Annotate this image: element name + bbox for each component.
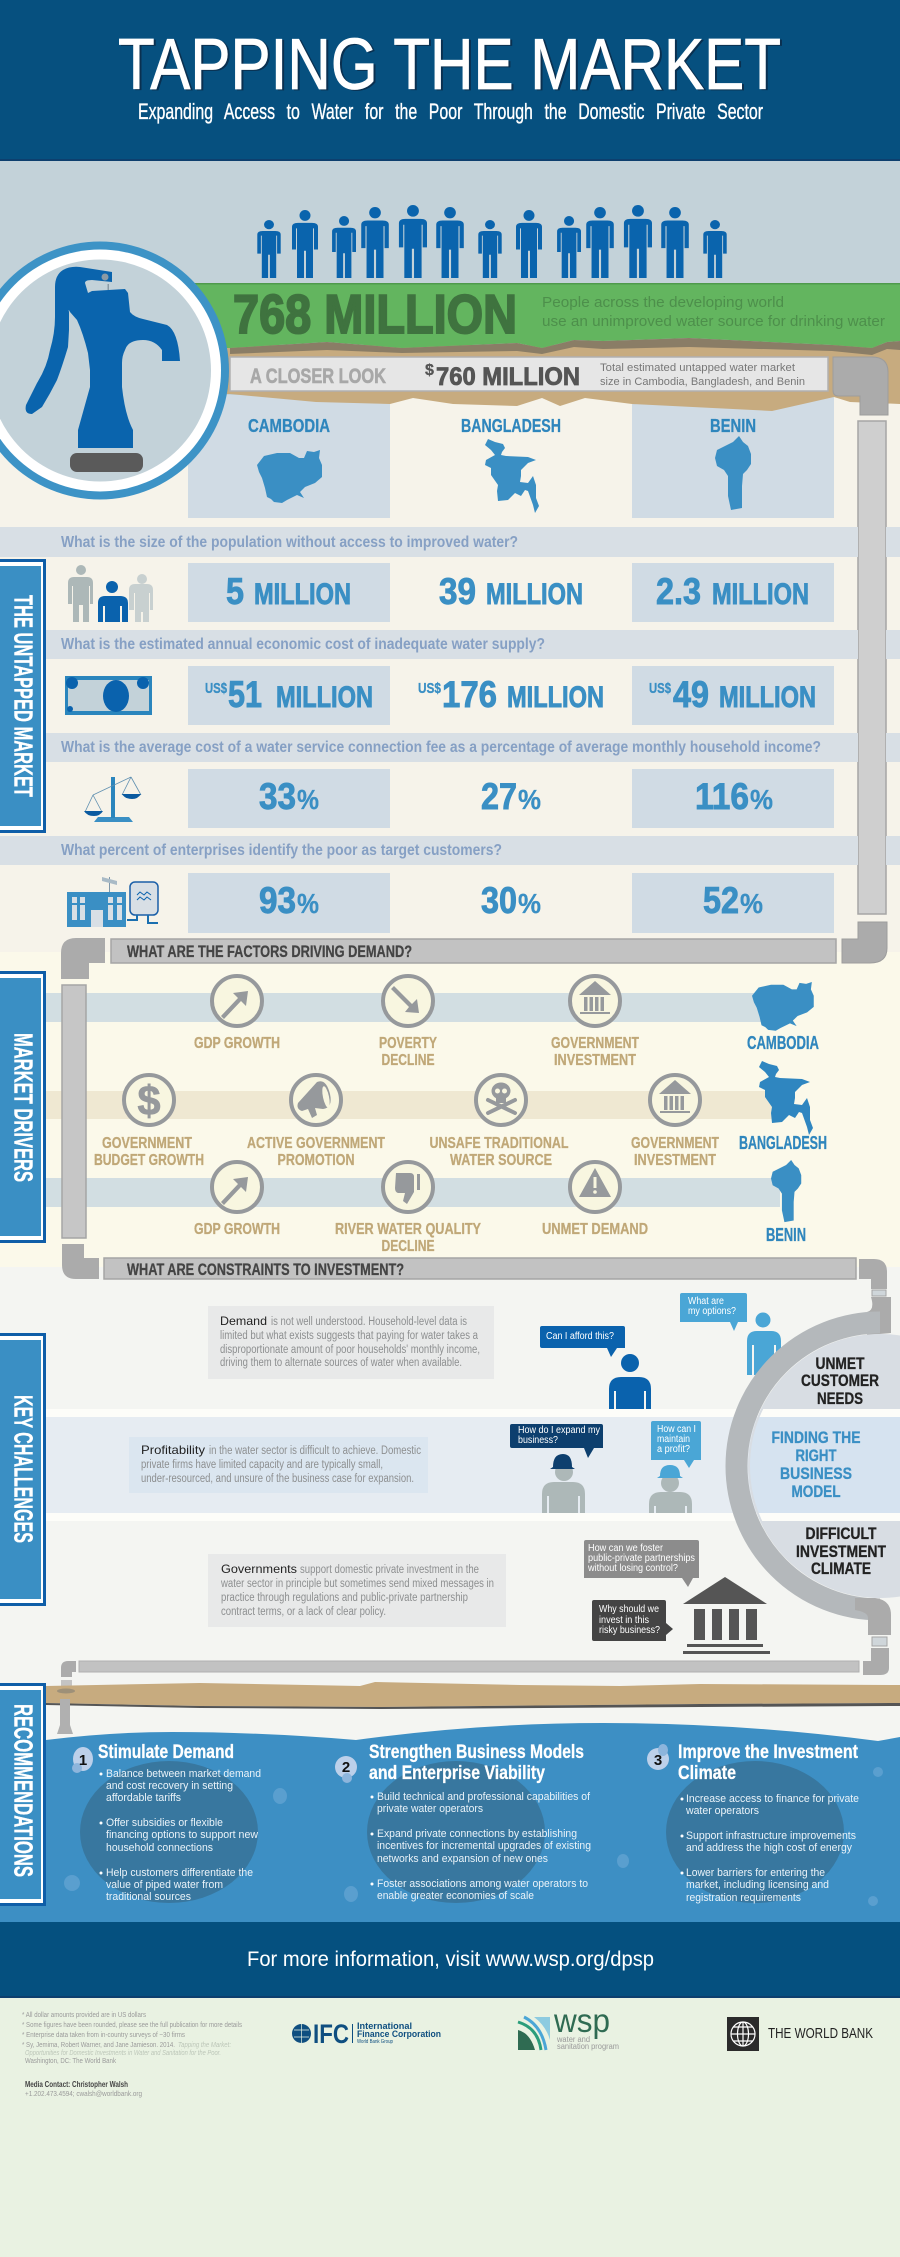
text box: demand: Demand — [220, 1314, 267, 1328]
driver labels: Cambodia row: POVERTY — [379, 1035, 437, 1052]
question 1: What is the size of the population without access to improved water? — [61, 534, 518, 551]
economic cost values: MILLION — [276, 681, 373, 714]
recommendation 3: and address the high cost of energy — [686, 1842, 852, 1854]
pipe: upper left elbow — [61, 938, 105, 979]
column: Benin: BENIN — [710, 416, 756, 436]
person: light blue customer — [747, 1312, 781, 1375]
footnotes: Tapping the Market: — [178, 2042, 231, 2049]
recommendation 3 — [647, 1742, 859, 1904]
icon: arrow down (poverty) — [391, 986, 419, 1013]
background: footer — [0, 1997, 900, 2257]
recommendation 2: private water operators — [377, 1803, 483, 1815]
driver labels: Bangladesh row: WATER SOURCE — [450, 1152, 552, 1169]
pipe: bottom left elbow and outlet — [61, 1661, 76, 1692]
speech bubble: why should we invest — [592, 1600, 673, 1641]
driver labels: Cambodia row — [194, 1035, 639, 1069]
speech bubble: how can I maintain: maintain — [657, 1434, 690, 1445]
speech bubble: why should we invest: risky business? — [599, 1625, 660, 1636]
media contact: +1.202.473.4594; cwalsh@worldbank.org — [25, 2091, 142, 2098]
country map: Benin: BENIN — [766, 1225, 806, 1245]
decorative water drops — [64, 1767, 883, 1906]
recommendation 1: Offer subsidies or flexible — [106, 1817, 223, 1829]
column: Benin — [710, 416, 756, 510]
icon: thumbs down — [395, 1173, 420, 1204]
economic cost values: 49 — [673, 674, 709, 715]
text box: demand: disproportionate amount of poor households' monthly income, — [220, 1344, 480, 1356]
arc label: difficult investment climate: CLIMATE — [811, 1559, 871, 1578]
tab: recommendations: RECOMMENDATIONS — [8, 1704, 38, 1877]
speech bubble: how do I expand — [510, 1424, 603, 1458]
speech bubble: how can I maintain: How can I — [657, 1424, 696, 1435]
speech bubble: why should we invest: invest in this — [599, 1615, 649, 1626]
icon: warning triangle — [579, 1168, 611, 1197]
population values: MILLION — [712, 578, 809, 611]
recommendation 3: Lower barriers for entering the — [686, 1867, 825, 1879]
recommendation 3: Climate — [678, 1763, 736, 1784]
economic cost values: US$ — [205, 680, 227, 697]
arc label: finding the right business model: BUSINESS — [780, 1464, 852, 1483]
speech bubble: what are my options: What are — [688, 1296, 724, 1307]
recommendation 2: networks and expansion of new ones — [377, 1853, 548, 1865]
speech bubble: how can I maintain — [651, 1421, 701, 1468]
economic cost values: 51 — [228, 674, 262, 715]
population values: 5 — [226, 571, 244, 612]
target customer values: % — [740, 888, 763, 919]
stat description: People across the developing world — [542, 295, 784, 311]
country map: Bangladesh: BANGLADESH — [739, 1133, 827, 1153]
number badge 2 — [335, 1756, 357, 1783]
text box: governments: water sector in principle but sometimes send mixed messages in — [220, 1578, 494, 1590]
speech bubble: can I afford this: Can I afford this? — [546, 1331, 614, 1342]
arc label: finding the right business model: FINDING THE — [772, 1428, 860, 1447]
driver labels: Bangladesh row: GOVERNMENT — [102, 1135, 192, 1152]
driver icon circles — [124, 976, 700, 1212]
icon: arrow up (Cambodia GDP) — [221, 991, 248, 1019]
headline stat: 768 million — [233, 283, 885, 345]
text box: governments — [208, 1554, 506, 1627]
logo: WSP: wsp — [553, 2002, 610, 2039]
speech bubble: public-private partnerships: How can we foster — [588, 1543, 664, 1554]
water body — [46, 1723, 900, 1922]
target customer values: 93 — [259, 880, 296, 921]
connection fee values: % — [297, 784, 319, 815]
driver labels: Cambodia row: INVESTMENT — [554, 1052, 636, 1069]
driver labels: Cambodia row: GDP GROWTH — [194, 1035, 280, 1052]
question 3: What is the average cost of a water service connection fee as a percentage of average monthly household income? — [61, 739, 821, 756]
footer banner — [0, 1922, 900, 1998]
number badge 3: 3 — [654, 1752, 662, 1769]
water pump icon — [0, 242, 229, 500]
footnotes: * Sy, Jemima, Robert Warner, and Jane Jamieson. 2014. — [22, 2042, 175, 2049]
population values: MILLION — [486, 578, 583, 611]
population values: 39 — [439, 571, 476, 612]
recommendation 1: financing options to support new — [106, 1829, 258, 1841]
speech bubble: how can I maintain: a profit? — [657, 1444, 690, 1455]
driver labels: Benin row: DECLINE — [382, 1238, 435, 1255]
recommendation 1: value of piped water from — [106, 1879, 223, 1891]
pipe: below arc — [855, 1598, 891, 1675]
text box: demand: driving them to alternate sources of water when available. — [220, 1357, 462, 1369]
connection fee values — [259, 776, 773, 817]
arc label: unmet customer needs: NEEDS — [817, 1389, 863, 1408]
footnotes: * All dollar amounts provided are in US dollars — [22, 2012, 146, 2019]
logo: IFC: IFC — [313, 2019, 349, 2049]
driver labels: Bangladesh row: PROMOTION — [278, 1152, 354, 1169]
arc panel sections — [740, 1334, 900, 1598]
ground: green grass band — [180, 283, 900, 348]
background: key challenges — [0, 1267, 900, 1747]
economic cost values: 176 — [442, 674, 497, 715]
footnotes: * Enterprise data taken from in-country surveys of ~30 firms — [22, 2032, 185, 2039]
icon: government building — [683, 1577, 770, 1654]
recommendation 1: Balance between market demand — [106, 1768, 261, 1780]
pipe: left vertical — [62, 985, 86, 1238]
arc label: difficult investment climate — [796, 1524, 887, 1578]
driver labels: Bangladesh row: BUDGET GROWTH — [94, 1152, 204, 1169]
speech bubble: public-private partnerships: without losing control? — [587, 1563, 678, 1574]
recommendation 3: Improve the Investment — [678, 1742, 859, 1763]
background: sky — [0, 161, 900, 401]
driver labels: Cambodia row: DECLINE — [382, 1052, 435, 1069]
recommendation 1: Help customers differentiate the — [106, 1867, 253, 1879]
speech bubble: can I afford this — [540, 1326, 625, 1357]
driver labels: Cambodia row: GOVERNMENT — [551, 1035, 639, 1052]
icon: skull and crossbones — [488, 1082, 515, 1113]
country map: Benin — [766, 1160, 806, 1245]
tab: key challenges: KEY CHALLENGES — [8, 1395, 38, 1543]
icon: balance scale — [84, 777, 141, 822]
tab: the untapped market: THE UNTAPPED MARKET — [8, 595, 38, 797]
icon: enterprise building and tank — [67, 877, 158, 927]
question 4: What percent of enterprises identify the poor as target customers? — [61, 842, 502, 859]
bar: factors driving demand — [111, 939, 836, 963]
driver labels: Benin row — [194, 1221, 648, 1255]
header banner — [0, 0, 900, 161]
icon: arrow up (Benin GDP) — [221, 1177, 248, 1205]
economic cost values: US$ — [418, 680, 442, 697]
text box: demand: limited but what exists suggests that paying for water takes a — [220, 1330, 478, 1342]
speech bubble: what are my options: my options? — [688, 1306, 736, 1317]
logo: WSP: sanitation program — [557, 2042, 619, 2051]
logo: IFC: Finance Corporation — [357, 2029, 441, 2039]
arc label: difficult investment climate: DIFFICULT — [806, 1524, 877, 1543]
bar: constraints to investment: WHAT ARE CONSTRAINTS TO INVESTMENT? — [127, 1260, 404, 1279]
tab: market drivers: MARKET DRIVERS — [8, 1033, 38, 1182]
headline stat: 768 million: 768 MILLION — [233, 283, 517, 345]
text box: governments: contract terms, or a lack of clear policy. — [221, 1606, 386, 1618]
text box: governments: practice through regulations and public-private partnership — [221, 1592, 468, 1604]
connection fee values: 116 — [695, 776, 749, 817]
speech bubble: what are my options — [680, 1293, 747, 1331]
arc pipe ring — [736, 1322, 880, 1610]
arc label: unmet customer needs: UNMET — [816, 1354, 865, 1373]
connection fee values: 33 — [259, 776, 296, 817]
logo: IFC — [292, 2019, 441, 2049]
driver labels: Bangladesh row: INVESTMENT — [634, 1152, 716, 1169]
speech bubble: public-private partnerships: public-private partnerships — [588, 1553, 695, 1564]
speech bubble: why should we invest: Why should we — [599, 1604, 659, 1615]
a closer look strip: A CLOSER LOOK — [250, 365, 386, 388]
media contact: Media Contact: Christopher Walsh — [25, 2080, 128, 2089]
pipe: underground outlet — [57, 1699, 73, 1734]
economic cost values: MILLION — [719, 681, 816, 714]
stat description — [542, 295, 885, 330]
text box: profitability — [129, 1437, 428, 1493]
icon: bank (Cambodia) — [579, 981, 611, 1014]
pipe: bottom horizontal — [79, 1661, 859, 1672]
question 2: What is the estimated annual economic cost of inadequate water supply? — [61, 636, 545, 653]
country columns header boxes — [188, 395, 834, 518]
country map: Cambodia — [747, 982, 819, 1053]
recommendation 1: traditional sources — [106, 1891, 191, 1903]
value boxes — [188, 563, 834, 933]
driver bands — [46, 993, 780, 1207]
population values — [226, 571, 809, 612]
text box: profitability: private firms have limited capacity and are typically small, — [141, 1459, 383, 1471]
market size: $ — [425, 362, 434, 379]
driver labels: Bangladesh row — [94, 1135, 719, 1169]
target customer values: % — [518, 888, 541, 919]
country map: Cambodia: CAMBODIA — [747, 1033, 819, 1053]
arc label: finding the right business model — [772, 1428, 860, 1501]
speech bubble: how do I expand: How do I expand my — [518, 1425, 600, 1436]
connection fee values: 27 — [481, 776, 517, 817]
text box: profitability: in the water sector is difficult to achieve. Domestic — [209, 1445, 421, 1457]
tab: the untapped market — [0, 559, 46, 833]
a closer look strip: size in Cambodia, Bangladesh, and Benin — [600, 376, 805, 388]
footnotes — [22, 2012, 242, 2065]
target customer values: 30 — [481, 880, 517, 921]
target customer values: % — [297, 888, 319, 919]
stat description: use an unimproved water source for drinking water — [542, 314, 885, 330]
text box: governments: support domestic private investment in the — [300, 1564, 479, 1576]
person: operator with light hard hat — [649, 1465, 692, 1513]
recommendation 3: registration requirements — [686, 1892, 801, 1904]
recommendation 1: affordable tariffs — [106, 1792, 181, 1804]
recommendation 1: household connections — [106, 1842, 213, 1854]
tab: key challenges — [0, 1333, 46, 1606]
population values: 2.3 — [656, 571, 701, 612]
number badge 1 — [72, 1747, 93, 1773]
person: dark blue customer — [609, 1354, 651, 1409]
pipe: right vertical — [858, 421, 886, 914]
text box: governments: Governments — [221, 1562, 297, 1576]
footnotes: Washington, DC: The World Bank — [25, 2058, 116, 2065]
tab: market drivers — [0, 971, 46, 1243]
logo: IFC: International — [357, 2021, 412, 2031]
recommendation 2: Expand private connections by establishing — [377, 1828, 577, 1840]
footnotes: * Some figures have been rounded, please see the full publication for more details — [22, 2022, 242, 2029]
recommendation 3: market, including licensing and — [686, 1879, 829, 1891]
logo: WSP: water and — [556, 2035, 590, 2044]
recommendation 2: Strengthen Business Models — [369, 1742, 584, 1763]
target customer values: 52 — [703, 880, 739, 921]
background: market drivers — [0, 952, 900, 1267]
driver labels: Benin row: RIVER WATER QUALITY — [335, 1221, 481, 1238]
recommendation 2: Foster associations among water operators to — [377, 1878, 588, 1890]
pipe: right elbow and connector — [859, 1259, 891, 1335]
pipe: lower right elbow — [842, 922, 887, 963]
person: operator with dark hard hat — [542, 1454, 585, 1513]
recommendation 2 — [335, 1742, 591, 1902]
driver labels: Bangladesh row: UNSAFE TRADITIONAL — [430, 1135, 569, 1152]
recommendation 2: enable greater economies of scale — [377, 1890, 534, 1902]
footer banner: For more information, visit www.wsp.org/dpsp — [247, 1948, 654, 1971]
logo: WSP — [518, 2002, 619, 2051]
crowd of people — [257, 205, 727, 278]
column: Cambodia — [248, 416, 330, 503]
bar: factors driving demand: WHAT ARE THE FACTORS DRIVING DEMAND? — [127, 942, 412, 961]
recommendation 3: water operators — [685, 1805, 759, 1817]
white separators — [46, 1409, 900, 1521]
pipe: lower left elbow — [62, 1244, 99, 1279]
driver labels: Bangladesh row: GOVERNMENT — [631, 1135, 719, 1152]
speech bubble: public-private partnerships — [584, 1540, 699, 1587]
column: Cambodia: CAMBODIA — [248, 416, 330, 436]
arc label: finding the right business model: MODEL — [792, 1482, 840, 1501]
logo: IFC: World Bank Group — [357, 2039, 393, 2045]
icon: megaphone — [298, 1081, 331, 1118]
recommendation 1 — [72, 1742, 261, 1903]
a closer look strip: Total estimated untapped water market — [600, 362, 795, 374]
country map: Bangladesh — [739, 1061, 827, 1153]
challenge middle band — [46, 1417, 900, 1513]
soil band — [46, 1682, 900, 1709]
icon: bank (Bangladesh) — [659, 1080, 691, 1113]
dark circles behind recommendations — [80, 1761, 844, 1903]
background: untapped market cream — [0, 395, 900, 952]
economic cost values — [205, 674, 816, 715]
logo: The World Bank: THE WORLD BANK — [768, 2025, 873, 2042]
recommendation 2: and Enterprise Viability — [369, 1763, 545, 1784]
text box: demand — [208, 1306, 494, 1379]
tab: recommendations — [0, 1683, 46, 1906]
economic cost values: MILLION — [507, 681, 604, 714]
column: Bangladesh: BANGLADESH — [461, 416, 561, 436]
column: Bangladesh — [461, 416, 561, 513]
number badge 2: 2 — [342, 1759, 350, 1776]
icon: dollar sign: $ — [138, 1077, 160, 1124]
recommendation 3: Increase access to finance for private — [686, 1793, 859, 1805]
ground: tan soil — [180, 345, 900, 411]
media contact — [25, 2080, 142, 2098]
a closer look strip — [230, 357, 828, 391]
recommendation 1: Stimulate Demand — [98, 1742, 234, 1763]
recommendation 1: and cost recovery in setting — [106, 1780, 233, 1792]
question bands — [0, 527, 900, 865]
recommendation 2: Build technical and professional capabilities of — [377, 1791, 591, 1803]
population values: MILLION — [254, 578, 351, 611]
connection fee values: % — [518, 784, 541, 815]
driver labels: Bangladesh row: ACTIVE GOVERNMENT — [247, 1135, 385, 1152]
logo: The World Bank — [727, 2017, 873, 2051]
text box: demand: is not well understood. Household-level data is — [271, 1316, 467, 1328]
icon: banknote — [65, 676, 152, 715]
title: TAPPING THE MARKET — [118, 25, 781, 105]
footnotes: Opportunities for Domestic Investments in Water and Sanitation for the Poor. — [25, 2050, 221, 2057]
ground: brown strip — [230, 338, 900, 355]
speech bubble: how do I expand: business? — [518, 1435, 558, 1446]
recommendation 2: incentives for incremental upgrades of existing — [377, 1840, 591, 1852]
number badge 3 — [647, 1744, 669, 1770]
arc label: unmet customer needs: CUSTOMER — [801, 1371, 879, 1390]
text box: profitability: under-resourced, and unsure of the business case for expansion. — [141, 1473, 414, 1485]
a closer look strip: 760 MILLION — [436, 363, 580, 391]
icon: three people — [68, 565, 153, 622]
connection fee values: % — [750, 784, 773, 815]
arc label: unmet customer needs — [801, 1354, 879, 1408]
number badge 1: 1 — [79, 1752, 87, 1769]
text box: profitability: Profitability — [141, 1443, 205, 1457]
target customer values — [259, 880, 763, 921]
pipe: top right elbow — [833, 357, 888, 415]
recommendation 3: Support infrastructure improvements — [686, 1830, 856, 1842]
driver labels: Benin row: UNMET DEMAND — [542, 1221, 648, 1238]
arc label: finding the right business model: RIGHT — [796, 1446, 837, 1465]
economic cost values: US$ — [649, 680, 671, 697]
bar: constraints to investment — [104, 1258, 856, 1279]
driver labels: Benin row: GDP GROWTH — [194, 1221, 280, 1238]
